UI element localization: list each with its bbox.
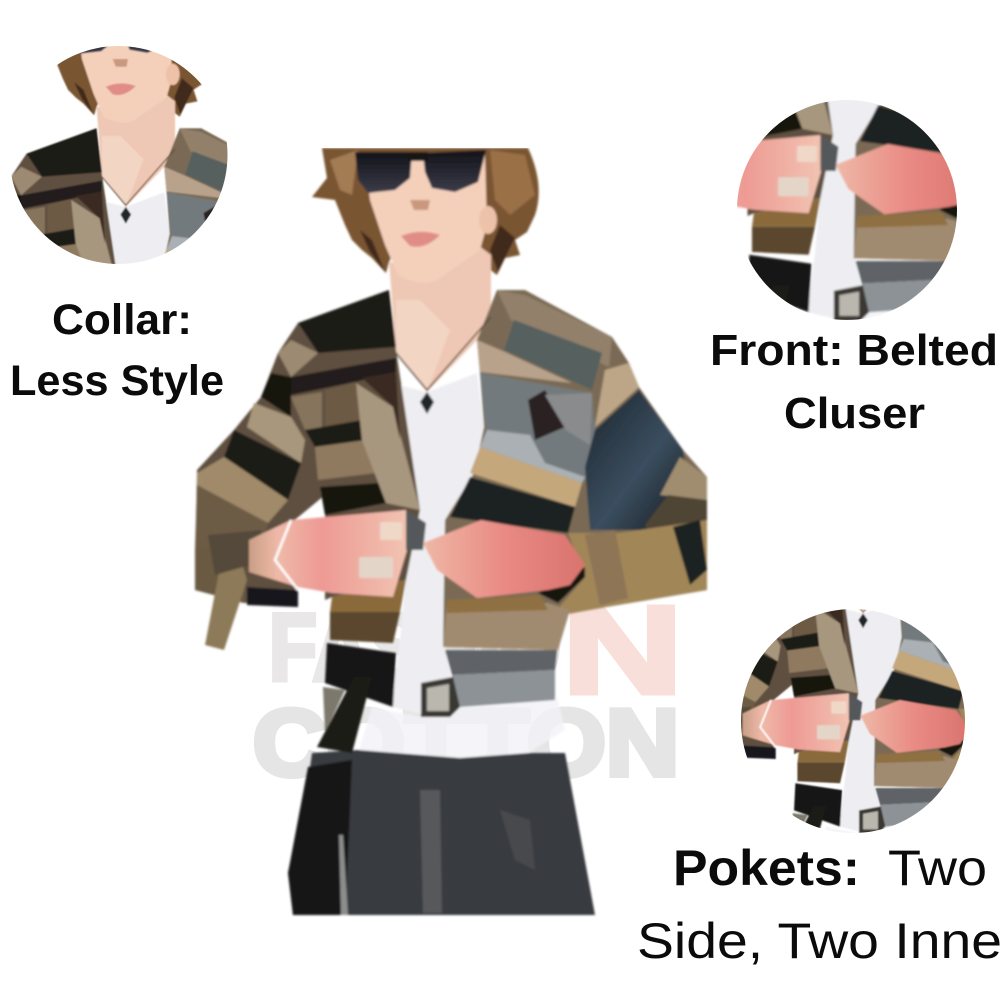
label: front: Cluser [784,389,925,438]
main photo: model wearing patchwork jacket [195,148,707,915]
label: collar: Collar: [52,296,192,344]
label: pockets [637,840,1000,969]
label: pockets: Two [888,840,987,896]
watermark: N [562,581,683,720]
watermark [253,581,683,795]
label: collar [10,296,224,405]
circle: front detail [737,100,957,320]
label: front [710,326,998,438]
circle: collar detail [12,46,228,264]
label: pockets: Pokets: [673,840,860,896]
label: pockets: Side, Two Inne [637,913,1000,969]
circle: pockets detail [741,609,965,833]
watermark: FASHIO [269,595,561,701]
label: front: Front: Belted [710,326,998,375]
watermark: COTTON [253,690,679,795]
label: collar: Less Style [10,357,224,405]
